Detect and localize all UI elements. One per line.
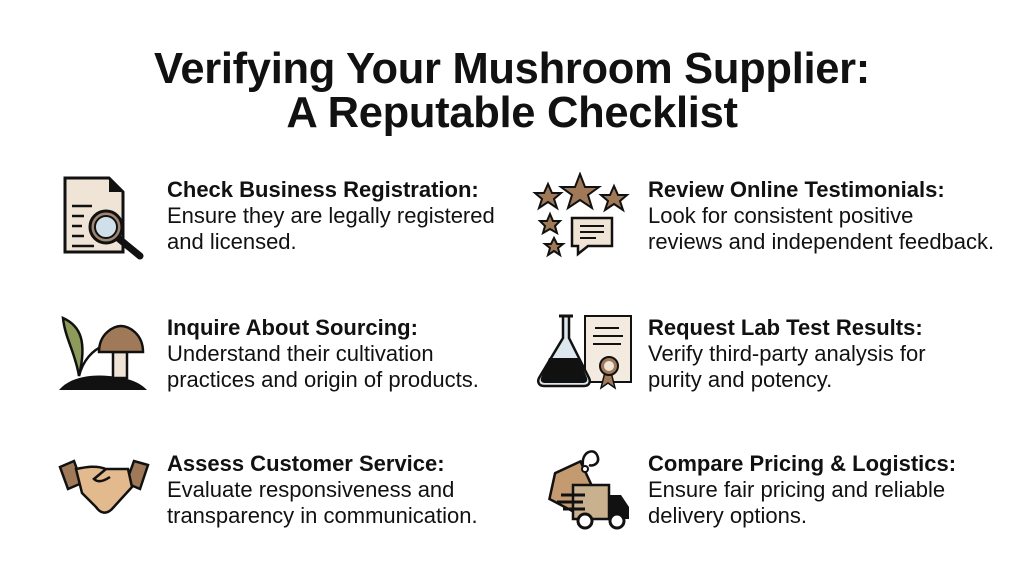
title: Verifying Your Mushroom Supplier: <box>154 45 870 93</box>
icon: document magnifier <box>64 176 144 260</box>
item: lab tests: purity and potency. <box>648 367 832 392</box>
item: pricing: delivery options. <box>648 503 807 528</box>
item: business registration: and licensed. <box>167 229 297 254</box>
item: customer service: Assess Customer Service: <box>167 451 445 476</box>
item: pricing: Ensure fair pricing and reliable <box>648 477 945 502</box>
item: customer service: Evaluate responsiveness and <box>167 477 454 502</box>
item: customer service: transparency in communication. <box>167 503 478 528</box>
item: testimonials <box>648 177 994 254</box>
item: testimonials: reviews and independent feedback. <box>648 229 994 254</box>
item: sourcing <box>167 315 479 392</box>
item: sourcing: Understand their cultivation <box>167 341 434 366</box>
item: lab tests <box>648 315 926 392</box>
item: testimonials: Look for consistent positive <box>648 203 913 228</box>
item: pricing <box>648 451 956 528</box>
icon: flask and certificate <box>536 314 632 390</box>
title <box>154 45 870 137</box>
item: lab tests: Request Lab Test Results: <box>648 315 923 340</box>
item: business registration <box>167 177 495 254</box>
item: pricing: Compare Pricing & Logistics: <box>648 451 956 476</box>
item: testimonials: Review Online Testimonials: <box>648 177 945 202</box>
item: customer service <box>167 451 478 528</box>
icon: handshake <box>58 459 150 514</box>
item: business registration: Ensure they are legally registered <box>167 203 495 228</box>
item: sourcing: Inquire About Sourcing: <box>167 315 418 340</box>
title: A Reputable Checklist <box>286 89 738 137</box>
icon: plant and mushroom <box>59 316 147 390</box>
item: sourcing: practices and origin of products. <box>167 367 479 392</box>
icon: stars and speech bubble <box>532 172 630 258</box>
item: lab tests: Verify third-party analysis for <box>648 341 926 366</box>
item: business registration: Check Business Registration: <box>167 177 479 202</box>
icon: price tag and truck <box>548 450 629 530</box>
